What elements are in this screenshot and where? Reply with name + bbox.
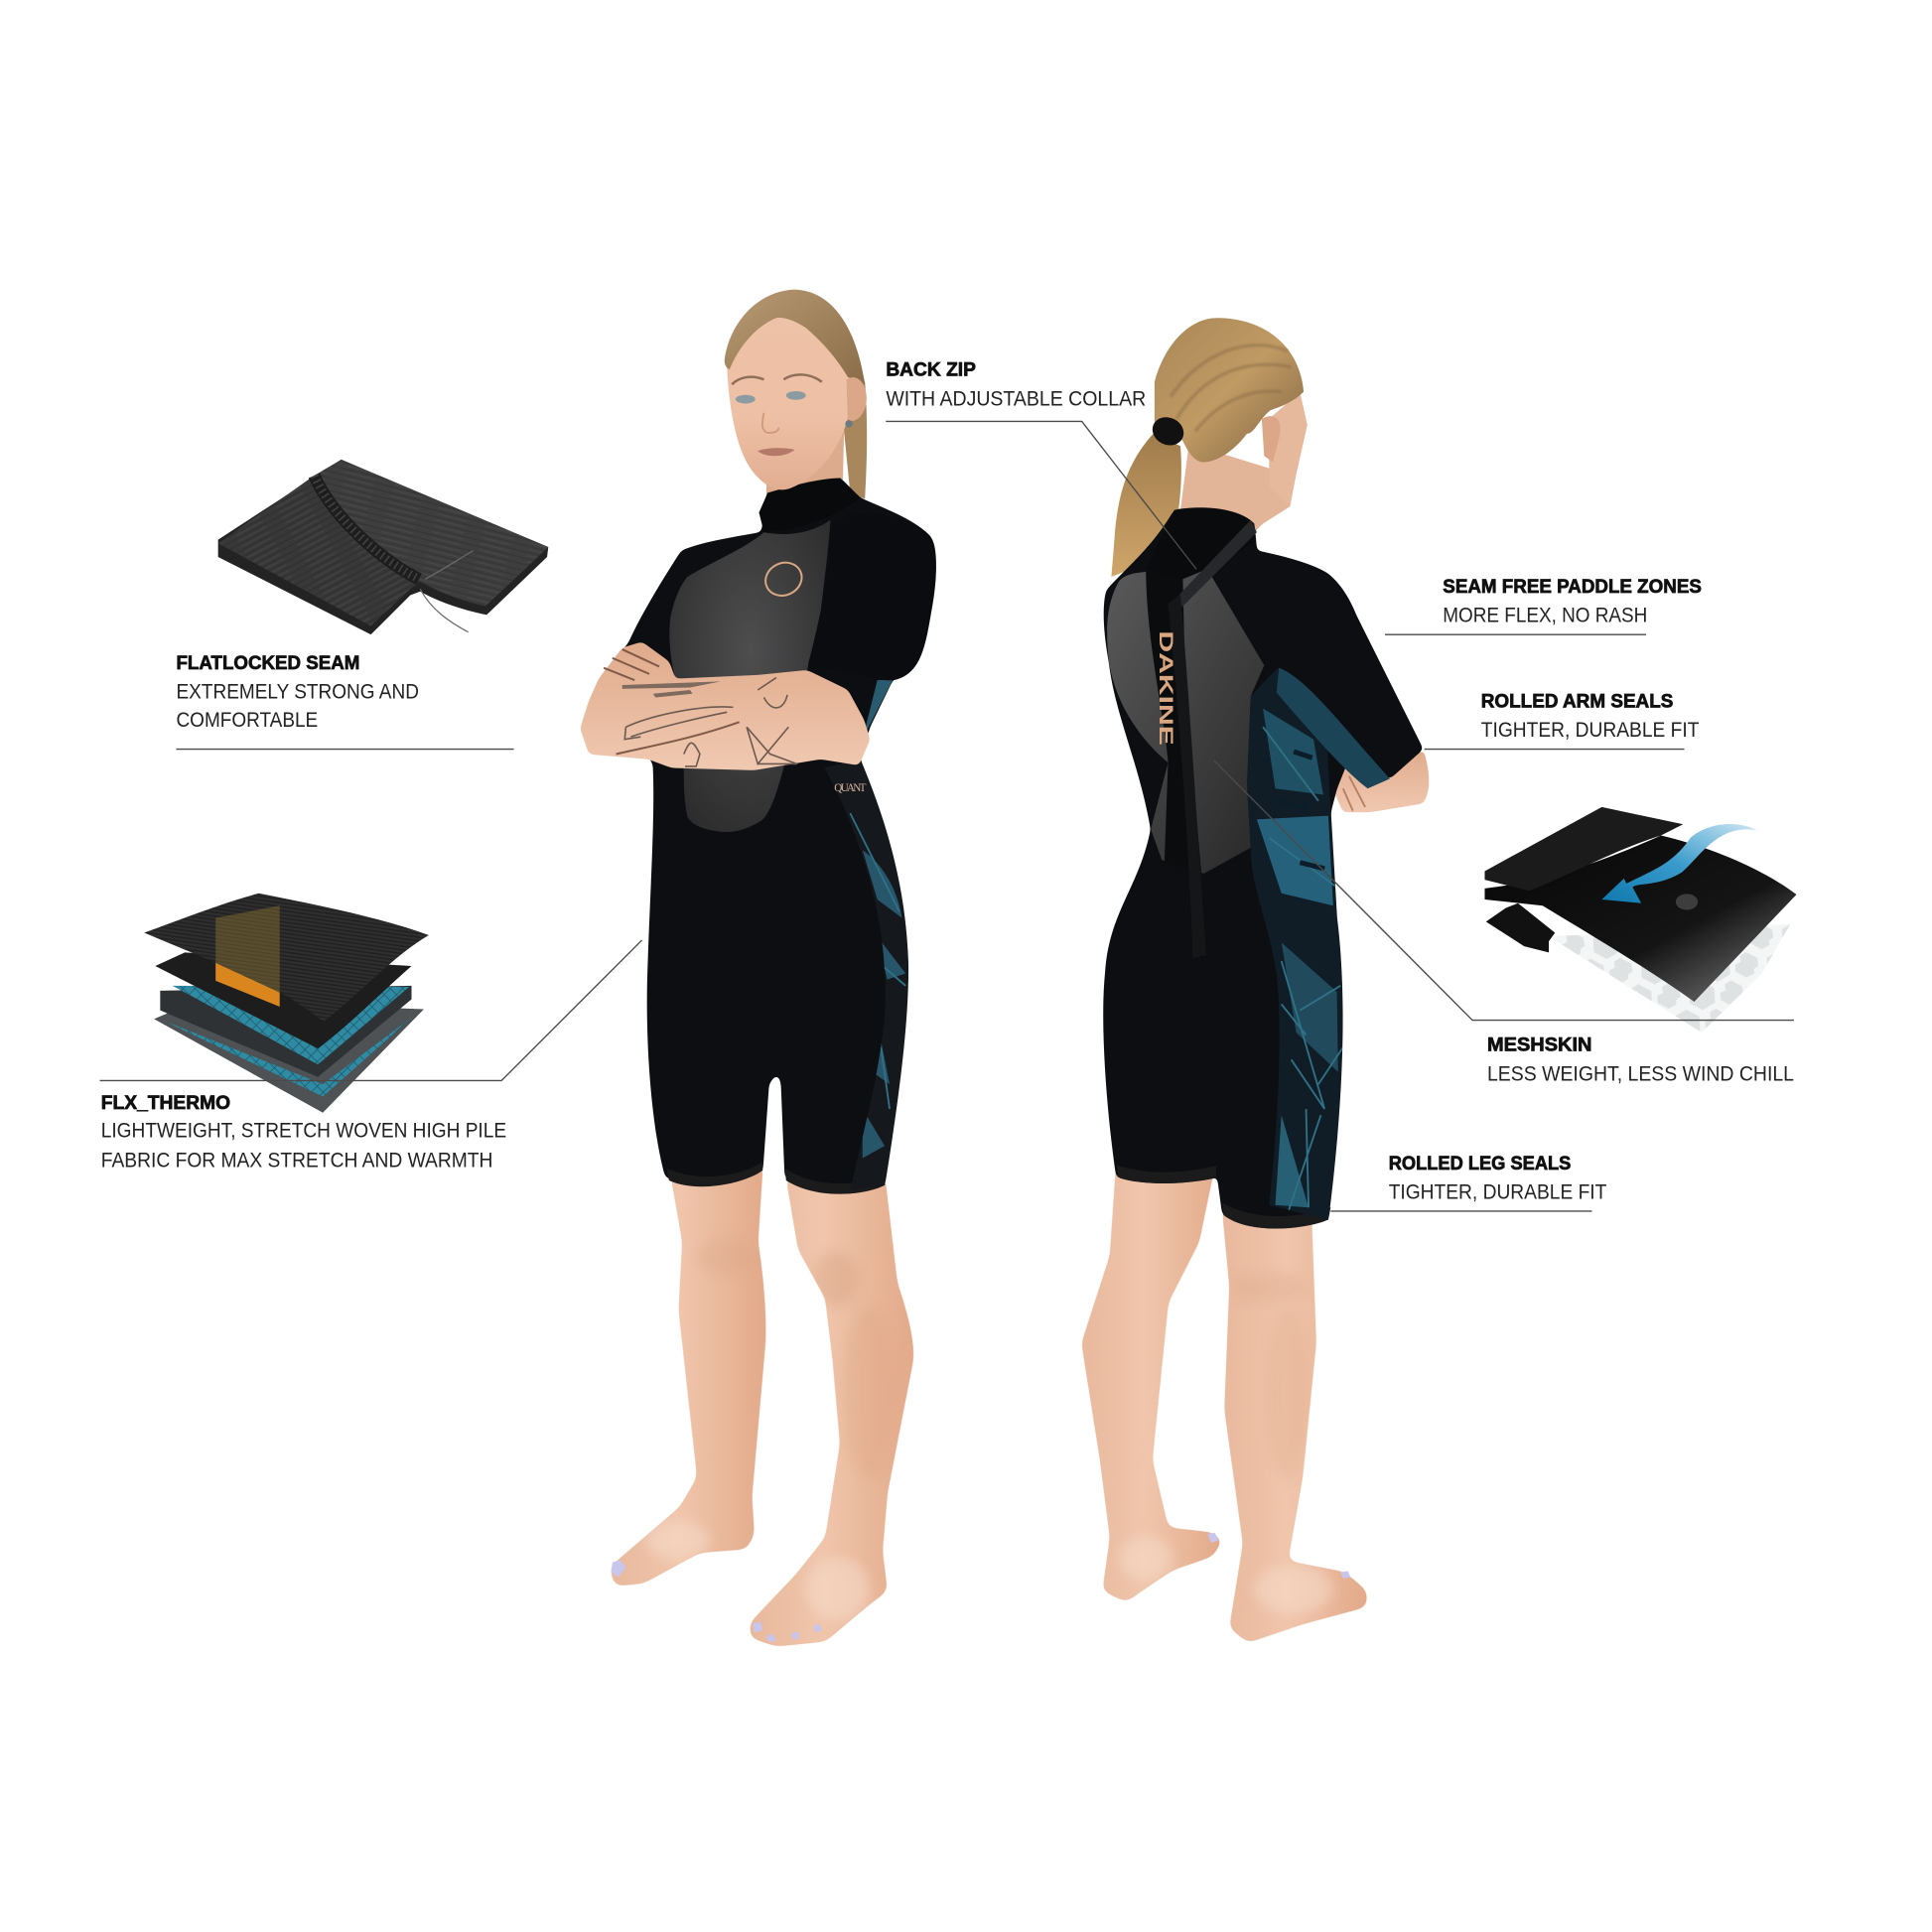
crossed arms [581,642,870,770]
chest panel [669,520,830,832]
callout: rolled leg seals [1330,1153,1606,1211]
swatch: flx thermo layers [144,894,429,1113]
seam sheet edges [218,460,548,634]
callout: seam free paddle zones: SEAM FREE PADDLE ZONES [1443,576,1702,598]
neck [766,431,844,497]
bottom layer [154,1001,424,1113]
logo badge [760,557,807,602]
seam right surface [314,460,548,607]
Quantum lettering: QUANT [834,782,867,794]
printed side panel front [824,761,908,1185]
tattoos [622,678,797,766]
callout: seam free paddle zones: MORE FLEX, NO RASH [1443,605,1647,627]
leg hems [666,1162,886,1194]
yellow glow [215,905,280,993]
right sleeve [807,513,936,680]
callout: rolled arm seals: ROLLED ARM SEALS [1481,690,1673,712]
printed side panel back [1247,668,1342,1219]
ear [1262,416,1281,462]
callout: meshskin: MESHSKIN [1487,1035,1591,1056]
hair [1155,318,1304,463]
back knee and heel shading [1119,1273,1333,1614]
DAKINE logo: DAKINE [1155,630,1176,746]
velcro strap [1169,520,1257,617]
top sheet [1484,807,1683,891]
knee and ankle shading [645,1253,872,1622]
scrunchie [1148,412,1188,451]
zip pull strap [1169,594,1206,959]
collar back [1146,508,1254,579]
stitch line [314,476,419,579]
arm side print [828,561,894,740]
legs [1082,1165,1366,1642]
ponytail behind neck [838,369,867,499]
blue air arrow [1601,824,1757,903]
callout: back zip: BACK ZIP [886,359,976,381]
callout: flatlocked seam: COMFORTABLE [176,709,318,732]
black layer [155,952,412,1048]
callout: flatlocked seam [176,652,514,750]
hair strands [1171,345,1292,431]
callout: flatlocked seam: FLATLOCKED SEAM [176,652,359,674]
wetsuit body [599,479,936,1193]
swatch: flatlocked seam [218,460,548,634]
figure: front view model [581,290,936,1646]
third layer [1486,903,1555,952]
neck [1180,444,1290,532]
teal mesh layer [160,986,412,1077]
back neoprene panel [1107,563,1264,874]
water drop [1676,894,1698,910]
callout: rolled arm seals: TIGHTER, DURABLE FIT [1481,719,1700,742]
swatch: meshskin layers [1484,807,1796,1033]
orange heat band [215,962,280,1007]
ponytail [1111,434,1181,577]
callout: rolled leg seals: ROLLED LEG SEALS [1389,1153,1571,1174]
seam left surface [218,476,420,625]
callout: back zip [886,359,1196,569]
callout: meshskin [1213,760,1794,1085]
callout: flatlocked seam: EXTREMELY STRONG AND [176,681,419,704]
leg hems back [1118,1166,1330,1228]
toenails [612,1560,822,1642]
thread [420,551,474,632]
callout: flx thermo: FLX_THERMO [101,1092,230,1114]
top layer [144,894,429,1022]
arm crease [604,649,740,755]
printed sleeve underside [1277,668,1390,788]
centre spine [1146,567,1201,873]
back arm and hand [1333,750,1429,812]
fingers shading [1343,776,1365,811]
figure: back view model [1082,318,1429,1642]
hair [725,290,865,384]
face sliver [1269,392,1308,506]
callout: flx thermo: FABRIC FOR MAX STRETCH AND WARMTH [101,1149,492,1172]
head [727,306,850,489]
hex mesh [1549,924,1790,1033]
ear [847,377,867,421]
wetsuit body back [1103,508,1423,1228]
callout: rolled leg seals: TIGHTER, DURABLE FIT [1389,1181,1606,1204]
collar [759,479,860,532]
callout: flx thermo [100,940,642,1172]
callout: rolled arm seals [1425,690,1700,750]
main foam [1484,835,1796,1002]
legs [610,1165,913,1646]
face features [732,374,822,456]
toenails [1207,1533,1350,1579]
callout: back zip: WITH ADJUSTABLE COLLAR [886,387,1146,410]
callout: seam free paddle zones [1385,576,1702,634]
callout: meshskin: LESS WEIGHT, LESS WIND CHILL [1487,1062,1794,1085]
callout: flx thermo: LIGHTWEIGHT, STRETCH WOVEN HIGH PILE [101,1120,506,1143]
